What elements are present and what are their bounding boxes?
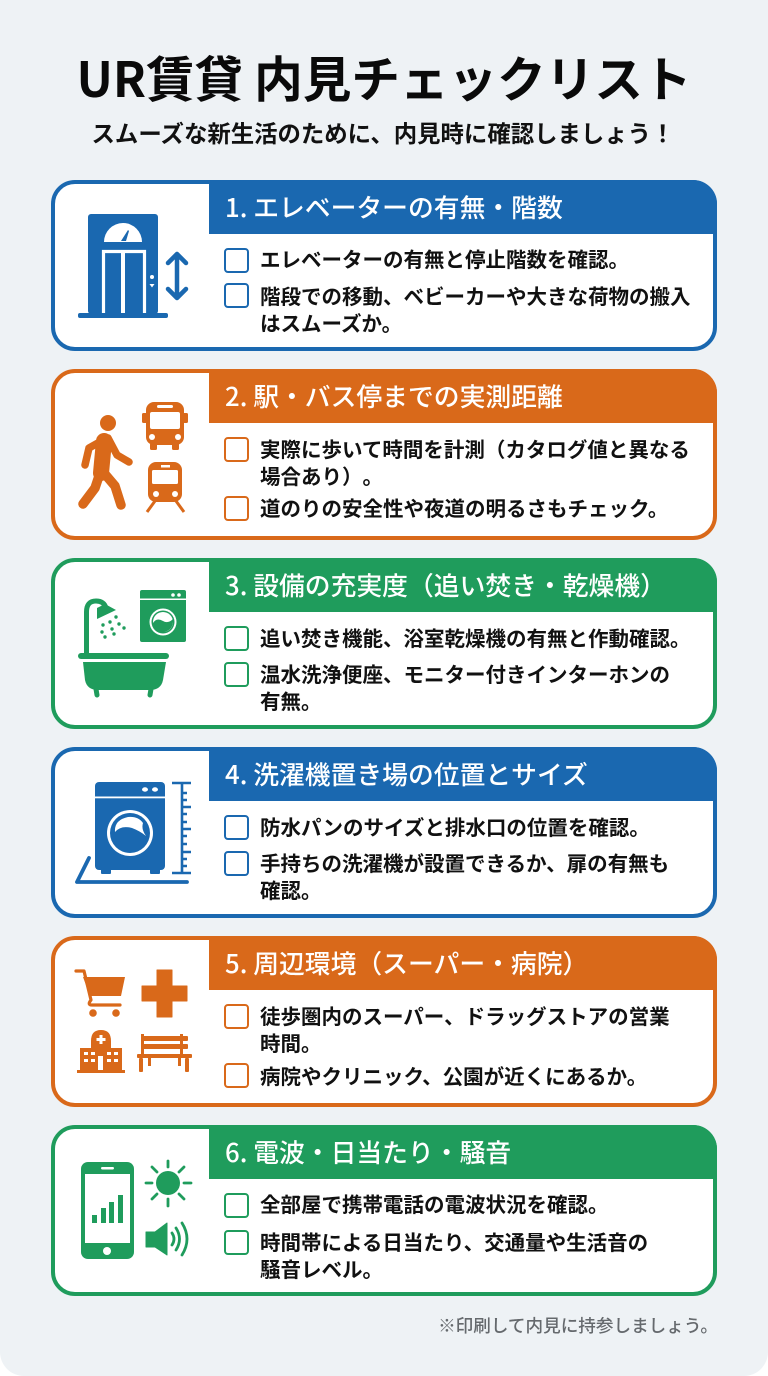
panel: 5 surroundings bbox=[51, 936, 717, 1107]
icon: elevator bbox=[78, 214, 186, 318]
heading: 5: 5. 周辺環境（スーパー・病院） bbox=[225, 944, 588, 981]
checklist text bbox=[260, 1226, 648, 1283]
footer note: ※印刷して内見に持参しましょう。 bbox=[438, 1313, 718, 1338]
checkbox bbox=[224, 1004, 249, 1029]
heading: 5 bbox=[209, 936, 717, 990]
icon: cart, cross, hospital and bench bbox=[76, 970, 192, 1073]
checklist text bbox=[260, 433, 690, 490]
panel: 2 distance bbox=[51, 369, 717, 540]
checkbox bbox=[224, 815, 249, 840]
checkbox bbox=[224, 1063, 249, 1088]
heading: 1: 1. エレベーターの有無・階数 bbox=[225, 188, 563, 225]
checklist text: 騒音レベル。 bbox=[260, 1253, 383, 1283]
checkbox bbox=[224, 496, 249, 521]
checklist text: 有無。 bbox=[260, 685, 322, 715]
checklist text: 道のりの安全性や夜道の明るさもチェック。 bbox=[260, 492, 668, 522]
panel: 6 signal sunlight noise bbox=[51, 1125, 717, 1296]
heading: 4: 4. 洗濯機置き場の位置とサイズ bbox=[225, 755, 588, 792]
checkbox bbox=[224, 1193, 249, 1218]
checklist text: 確認。 bbox=[260, 874, 322, 904]
checklist text: 追い焚き機能、浴室乾燥機の有無と作動確認。 bbox=[260, 622, 690, 652]
subtitle: スムーズな新生活のために、内見時に確認しましょう！ bbox=[92, 115, 674, 149]
checklist text: 手持ちの洗濯機が設置できるか、扉の有無も bbox=[260, 847, 669, 877]
heading: 4 bbox=[209, 747, 717, 801]
checkbox bbox=[224, 1230, 249, 1255]
checklist text: 防水パンのサイズと排水口の位置を確認。 bbox=[260, 811, 650, 841]
heading: 2: 2. 駅・バス停までの実測距離 bbox=[225, 377, 563, 414]
checkbox bbox=[224, 248, 249, 273]
heading: 6 bbox=[209, 1125, 717, 1179]
checkbox bbox=[224, 851, 249, 876]
heading: 3 bbox=[209, 558, 717, 612]
checklist text bbox=[260, 847, 669, 904]
checklist text: 病院やクリニック、公園が近くにあるか。 bbox=[260, 1060, 647, 1090]
panel: 1 elevator bbox=[51, 180, 717, 351]
heading: 1 bbox=[209, 180, 717, 234]
icon: phone, sun and speaker bbox=[81, 1161, 191, 1259]
checkbox bbox=[224, 437, 249, 462]
checklist text: 実際に歩いて時間を計測（カタログ値と異なる bbox=[260, 433, 690, 463]
checklist text bbox=[260, 658, 670, 715]
checklist text: 徒歩圏内のスーパー、ドラッグストアの営業 bbox=[260, 1000, 670, 1030]
checklist text bbox=[260, 1000, 670, 1057]
checkbox bbox=[224, 626, 249, 651]
checklist text: エレベーターの有無と停止階数を確認。 bbox=[260, 243, 629, 273]
icon: shower, bathtub and washer bbox=[78, 590, 186, 695]
checklist text bbox=[260, 280, 690, 337]
heading: 3: 3. 設備の充実度（追い焚き・乾燥機） bbox=[225, 566, 666, 603]
checklist text: 時間帯による日当たり、交通量や生活音の bbox=[260, 1226, 648, 1256]
checklist text: 階段での移動、ベビーカーや大きな荷物の搬入 bbox=[260, 280, 690, 310]
checklist text: 全部屋で携帯電話の電波状況を確認。 bbox=[260, 1188, 608, 1218]
checklist text: 温水洗浄便座、モニター付きインターホンの bbox=[260, 658, 670, 688]
title: UR賃貸 内見チェックリスト bbox=[76, 41, 692, 111]
checklist text: 場合あり）。 bbox=[260, 460, 383, 490]
checklist text: はスムーズか。 bbox=[260, 307, 402, 337]
checkbox bbox=[224, 662, 249, 687]
panel: 3 equipment bbox=[51, 558, 717, 729]
icon: washing machine with ruler bbox=[77, 782, 191, 882]
checkbox bbox=[224, 283, 249, 308]
heading: 6: 6. 電波・日当たり・騒音 bbox=[225, 1133, 511, 1170]
checklist text: 時間。 bbox=[260, 1027, 322, 1057]
panel: 4 washer space bbox=[51, 747, 717, 918]
icon: walker, bus and train bbox=[83, 402, 188, 512]
heading: 2 bbox=[209, 369, 717, 423]
